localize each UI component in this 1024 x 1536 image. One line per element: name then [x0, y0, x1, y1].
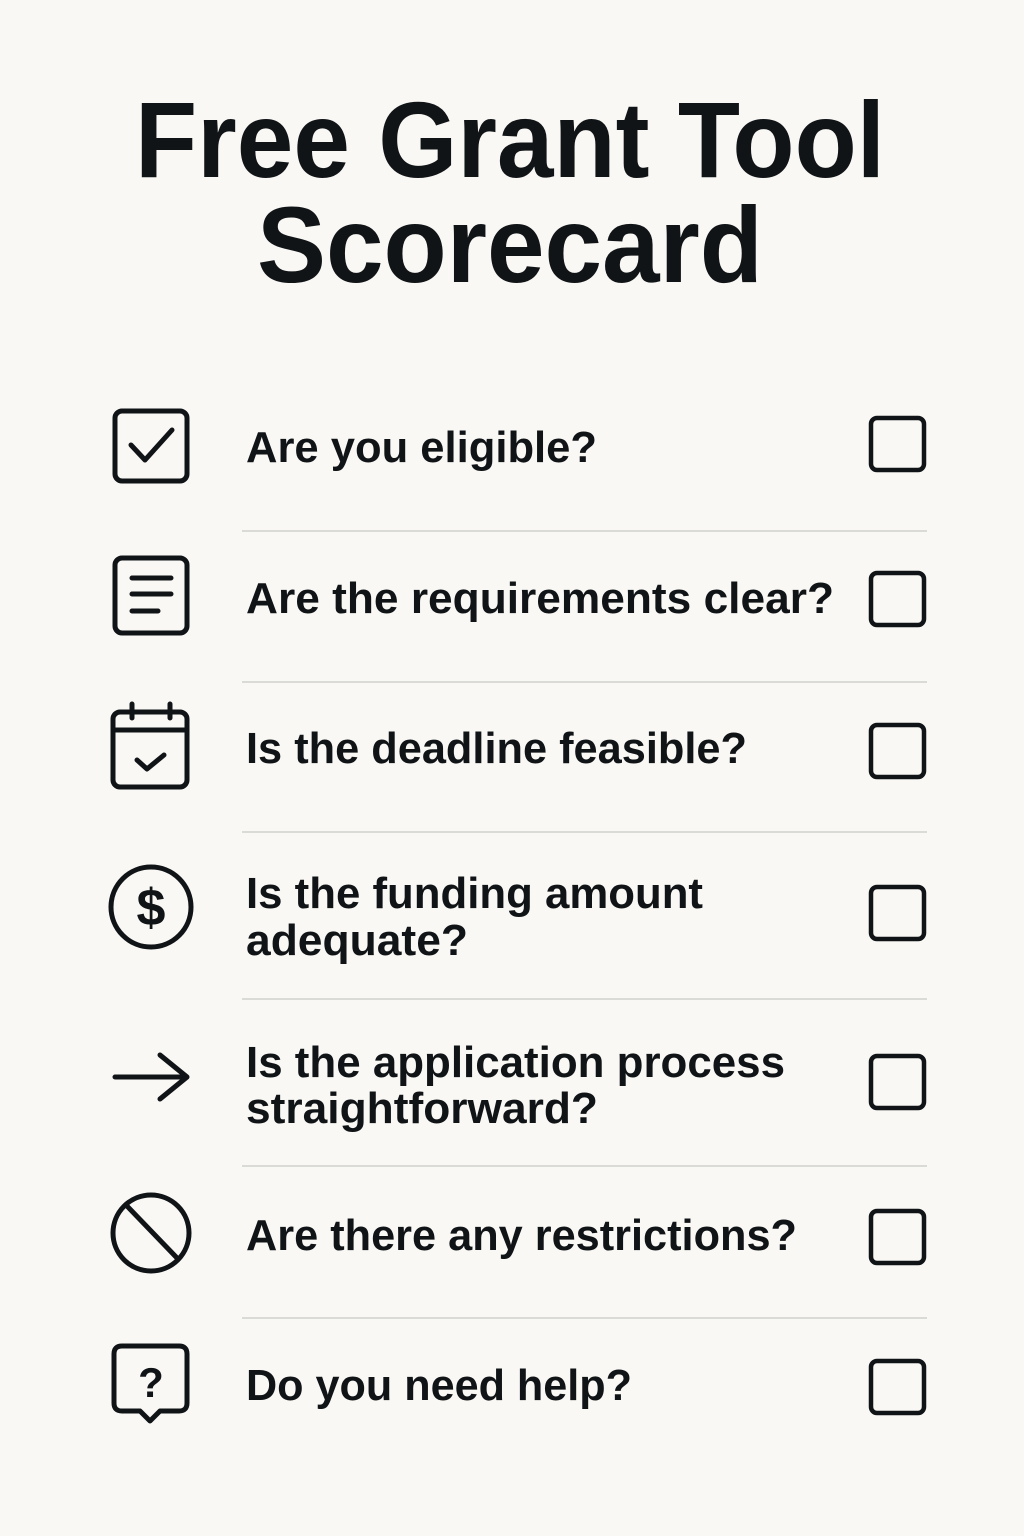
question text: Is the funding amount — [246, 869, 703, 918]
row: funding: adequate? — [246, 916, 468, 965]
question text: Are the requirements clear? — [246, 574, 834, 623]
row: restrictions — [113, 1195, 924, 1271]
icon: checked box — [115, 411, 187, 481]
checkbox — [871, 1056, 924, 1108]
row: application process — [115, 1038, 924, 1133]
checkbox — [871, 1361, 924, 1413]
icon: document — [115, 558, 187, 633]
checkbox — [871, 887, 924, 939]
title: Free Grant Tool — [135, 79, 885, 200]
question text: Is the deadline feasible? — [246, 724, 747, 773]
row: application process: straightforward? — [246, 1084, 598, 1133]
checkbox — [871, 725, 924, 777]
question text: Are you eligible? — [246, 423, 597, 472]
icon: question bubble: ? — [138, 1359, 164, 1406]
icon: dollar coin: $ — [137, 879, 166, 937]
row: requirements — [115, 558, 924, 633]
icon: arrow — [115, 1055, 187, 1099]
icon: dollar coin — [111, 867, 191, 947]
icon: calendar — [113, 704, 187, 787]
icon: question bubble — [114, 1346, 187, 1421]
row: eligible — [115, 411, 924, 481]
checkbox — [871, 573, 924, 625]
icon: prohibited — [113, 1195, 189, 1271]
row: deadline — [113, 704, 924, 787]
title: Scorecard — [257, 184, 763, 305]
question text: Is the application process — [246, 1038, 785, 1087]
title — [135, 79, 885, 305]
checkbox — [871, 1211, 924, 1263]
checkbox — [871, 418, 924, 470]
row: funding — [111, 867, 924, 965]
row: help — [114, 1346, 924, 1421]
question text: Are there any restrictions? — [246, 1211, 797, 1260]
question text: Do you need help? — [246, 1361, 632, 1410]
